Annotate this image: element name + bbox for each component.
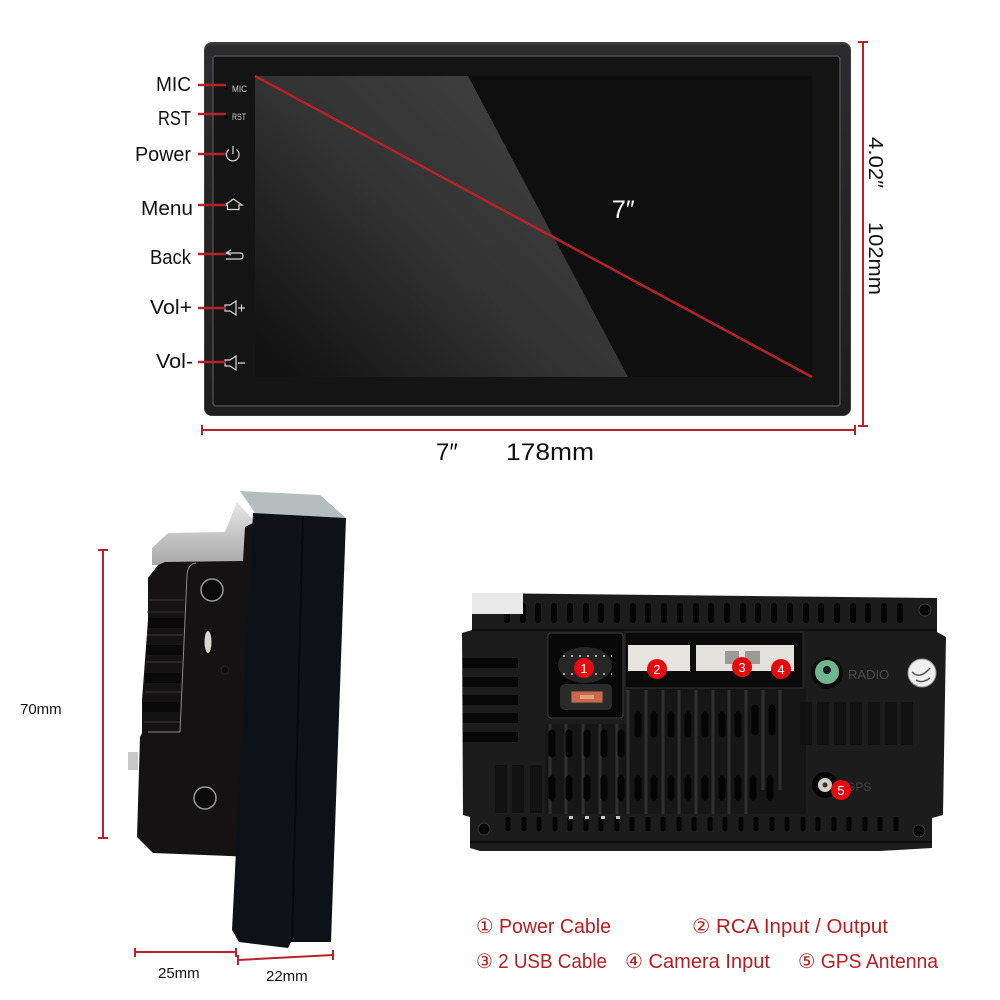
side depth dimension: 70mm [20, 701, 62, 718]
numbered markers: 2 [653, 662, 661, 677]
white connector: USB [696, 645, 794, 671]
button callouts: RST [158, 108, 191, 130]
radio socket: RADIO [848, 667, 889, 682]
width dimension: 178mm [506, 439, 594, 466]
connector legend: ③ 2 USB Cable [476, 951, 607, 973]
numbered markers [574, 657, 851, 800]
connector legend: ② RCA Input / Output [692, 916, 888, 938]
front button icons [224, 84, 247, 370]
sticker [472, 593, 523, 614]
25mm dimension [135, 948, 236, 982]
width dimension: 7″ [436, 439, 458, 466]
gps socket: GPS [846, 780, 871, 794]
bottom vent slots [508, 819, 896, 829]
button callouts: Vol+ [150, 297, 192, 319]
front panel: head unit [204, 42, 851, 416]
button callouts [135, 74, 226, 373]
button callouts: Menu [141, 198, 193, 220]
side view of head unit [128, 491, 346, 948]
fins [143, 623, 184, 707]
middle vent slots [552, 708, 772, 797]
recessed rib field [545, 724, 628, 814]
button callouts: Power [135, 144, 191, 166]
white connector: RCA [628, 645, 690, 671]
height dimension [858, 42, 886, 426]
numbered markers: 3 [738, 660, 746, 675]
power connector bay [548, 633, 623, 718]
screen diagonal with size label [255, 76, 812, 377]
22mm dimension [238, 950, 333, 985]
height dimension: 102mm [864, 222, 886, 295]
button callouts: Vol- [156, 351, 193, 373]
connector legend: ① Power Cable [476, 916, 611, 938]
side depth dimension [20, 550, 108, 838]
screen diagonal with size label: 7″ [612, 196, 635, 224]
button callouts: Back [150, 247, 192, 269]
rear view of head unit [462, 593, 946, 851]
front button icons: RST [232, 112, 246, 122]
numbered markers: 4 [777, 662, 785, 677]
numbered markers: 1 [580, 661, 588, 676]
connector legend: ⑤ GPS Antenna [798, 951, 939, 973]
front button icons: MIC [232, 84, 247, 94]
connector legend: ④ Camera Input [625, 951, 770, 973]
connector bay [625, 632, 803, 688]
top vent slots [507, 606, 900, 620]
screen [255, 76, 812, 377]
22mm dimension: 22mm [266, 968, 308, 985]
25mm dimension: 25mm [158, 965, 200, 982]
front block [232, 513, 346, 948]
numbered markers: 5 [837, 783, 845, 798]
screws [478, 604, 931, 837]
width dimension [202, 425, 855, 466]
side heat vents [463, 663, 518, 737]
radio socket [811, 657, 889, 689]
metal top [152, 502, 255, 565]
button callouts: MIC [156, 74, 191, 96]
gps socket [812, 772, 871, 798]
chassis [137, 522, 255, 857]
connector legend [476, 916, 939, 973]
recessed blocks [501, 702, 907, 813]
height dimension: 4.02″ [864, 137, 886, 188]
white logo sticker [908, 659, 936, 687]
